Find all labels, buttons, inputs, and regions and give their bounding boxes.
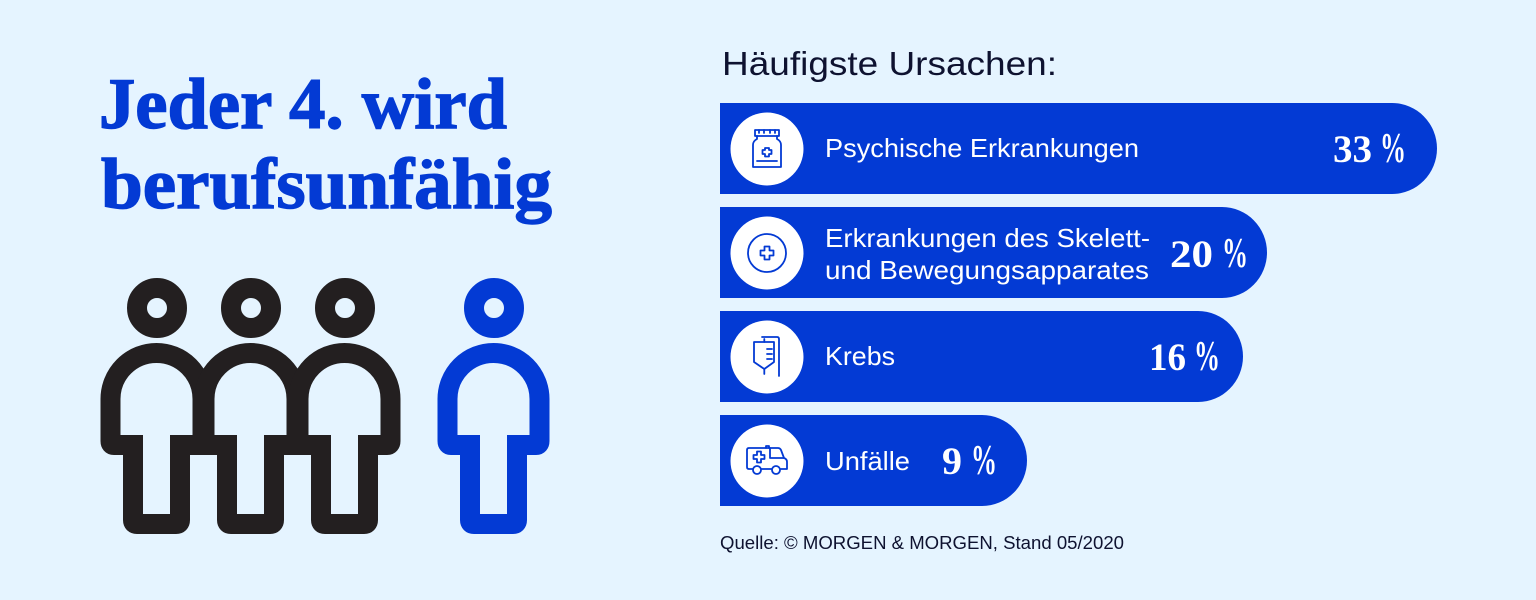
source note: Quelle: © MORGEN & MORGEN, Stand 05/2020 [720,533,1124,553]
people pictogram: one in four [110,288,540,524]
icon: medicine bottle [753,130,781,167]
bar: Skelett- und Bewegungsapparat 20 %: 20 [1170,233,1213,276]
bar: psychische Erkrankungen 33 %: 33 [1333,128,1372,171]
bar: Krebs 16 % [720,311,1243,402]
bar: psychische Erkrankungen 33 %: Psychische Erkrankungen [825,133,1139,163]
title: Jeder 4. wird [99,64,507,144]
chart heading: Häufigste Ursachen: [722,45,1057,82]
person 3 [298,288,390,524]
person 1 [110,288,202,524]
bar: Skelett- und Bewegungsapparat 20 %: % [1222,231,1248,277]
bar: Skelett- und Bewegungsapparat 20 %: Erkrankungen des Skelett- [825,223,1150,253]
bar: psychische Erkrankungen 33 % [720,103,1437,194]
person 2 [204,288,296,524]
bar: Unfälle 9 %: % [971,438,997,484]
bar: Krebs 16 %: % [1194,334,1220,380]
bar: Unfälle 9 %: Unfälle [825,446,910,476]
title [99,64,552,224]
bar chart: causes [720,103,1437,506]
icon: circled cross [748,234,786,272]
icon: ambulance [747,446,787,474]
bar: psychische Erkrankungen 33 %: % [1380,126,1406,172]
bar: Skelett- und Bewegungsapparat 20 % [720,207,1267,298]
icon: infusion bag [754,337,779,376]
title: berufsunfähig [101,144,552,224]
bar: Skelett- und Bewegungsapparat 20 %: und Bewegungsapparates [825,255,1149,285]
person 4, highlighted [448,288,540,524]
bar: Krebs 16 %: 16 [1149,336,1186,379]
bar: Krebs 16 %: Krebs [825,341,895,371]
bar: Unfälle 9 % [720,415,1027,506]
bar: Unfälle 9 %: 9 [942,440,962,483]
